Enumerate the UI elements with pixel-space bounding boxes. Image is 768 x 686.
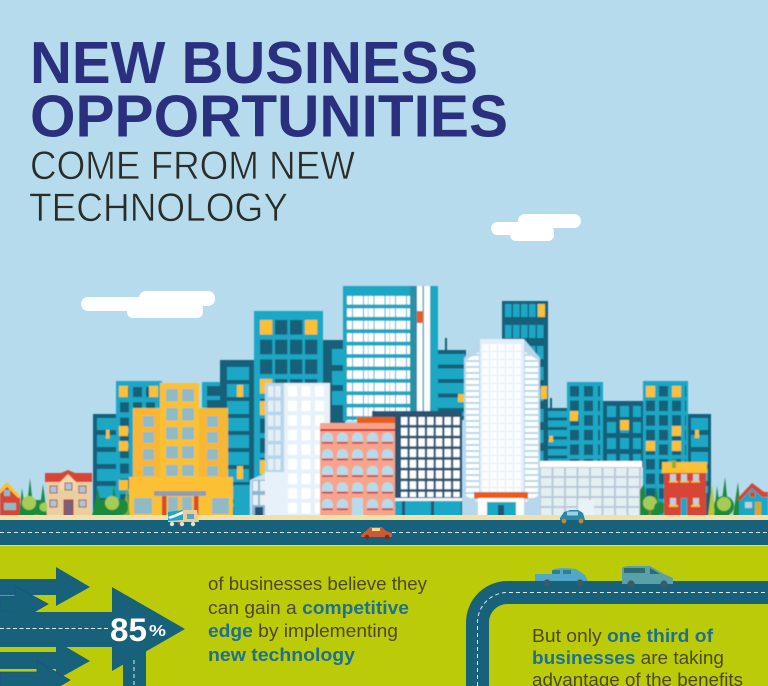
trees: right group (640, 484, 666, 516)
building: dark left (93, 414, 116, 516)
text: competitive edge: of businesses believe they (208, 574, 427, 594)
building: navy grid (372, 411, 462, 516)
title: TECHNOLOGY (29, 186, 288, 230)
vehicle: cement truck (168, 510, 199, 526)
building: dark back with antenna (438, 338, 466, 420)
vehicle: red car (361, 527, 392, 539)
building: small back teal (202, 382, 222, 442)
building: striped tower (343, 286, 438, 421)
vehicle: van (622, 566, 673, 588)
trees: mid left group (92, 484, 130, 516)
vehicle: blue car (560, 510, 585, 523)
text: competitive edge (208, 574, 427, 665)
text: one third (532, 626, 743, 686)
text: competitive edge: edge by implementing (208, 621, 398, 641)
green ground (0, 546, 768, 686)
sky background (0, 0, 768, 546)
building: red shop (662, 460, 707, 516)
house: beige left (45, 470, 92, 516)
text: competitive edge: new technology (208, 645, 355, 665)
arrow: upper outlined (0, 586, 48, 623)
trees: far right group (708, 477, 741, 516)
road: rounded loop (478, 592, 768, 686)
stat: 85%: 85 (110, 612, 147, 648)
building: teal right 2 (643, 381, 688, 516)
city skyline (0, 286, 768, 516)
building: white annex (250, 472, 288, 516)
title: OPPORTUNITIES (30, 84, 508, 150)
arrow: vertical (123, 650, 146, 686)
title: NEW BUSINESS (30, 30, 478, 96)
vehicle: pickup truck (535, 568, 588, 587)
building: salmon brick (320, 411, 395, 516)
stat: 85%: % (149, 623, 166, 640)
trees: left group (19, 478, 48, 516)
building: white block (265, 383, 330, 516)
building: white tower (464, 339, 540, 516)
building: dark right (603, 401, 644, 467)
building: small teal right (546, 398, 568, 468)
building: glass atrium (540, 461, 642, 516)
arrow: top (0, 567, 90, 606)
stat: 85% (110, 612, 166, 648)
house: red left (0, 482, 21, 516)
building: dark tall (502, 301, 548, 516)
text: one third: But only one third of (532, 626, 714, 646)
text: competitive edge: can gain a competitive (208, 598, 409, 618)
arrow: lower outlined (0, 661, 70, 686)
title: COME FROM NEW (30, 144, 356, 188)
title (29, 30, 508, 230)
arrow: bottom (0, 641, 90, 680)
road: city street (0, 515, 768, 545)
building: teal right 1 (567, 382, 603, 466)
building: dark centre-left (220, 360, 254, 516)
building: teal left (116, 381, 162, 516)
cloud: left (81, 291, 215, 318)
building: teal tall (254, 311, 323, 516)
house: blue right (737, 483, 768, 516)
arrow: main (0, 587, 185, 671)
arrows: 85 percent (0, 567, 185, 686)
building: yellow hotel (129, 383, 233, 516)
building: dark far right (688, 414, 711, 516)
cloud: top right (491, 214, 581, 241)
text: one third: businesses are taking (532, 648, 724, 668)
building: dark back (323, 340, 345, 425)
